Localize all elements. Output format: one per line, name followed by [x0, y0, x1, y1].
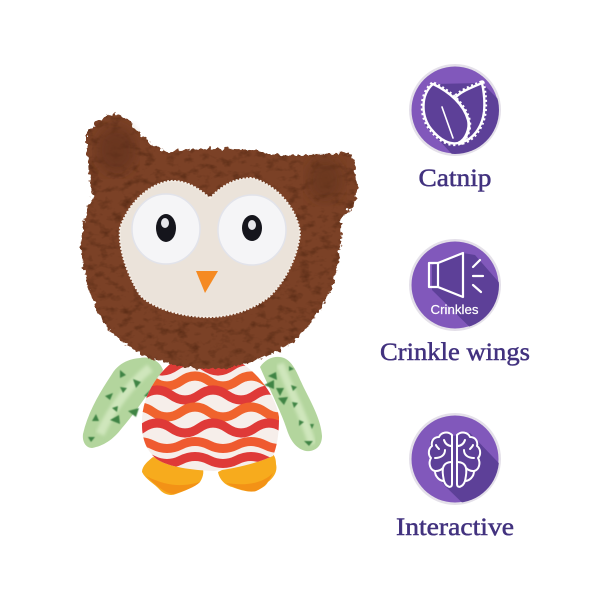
interactive shadow [430, 433, 499, 502]
catnip label: Catnip [418, 165, 492, 192]
ear shading [96, 126, 136, 174]
right foot [218, 453, 276, 492]
face patch [120, 178, 300, 317]
crinkle wings label: Crinkle wings [380, 339, 530, 366]
furry head [81, 114, 356, 368]
icon: brain [429, 433, 480, 487]
right eye [218, 195, 286, 265]
interactive label: Interactive [396, 514, 514, 541]
crinkles badge [409, 239, 501, 331]
crinkles shadow [432, 253, 499, 326]
icon: catnip leaves [424, 83, 484, 143]
left eye [132, 194, 200, 264]
striped body [142, 364, 279, 471]
catnip badge [409, 64, 501, 156]
right wing [260, 357, 322, 451]
left foot [142, 457, 203, 495]
catnip shadow [425, 83, 499, 154]
interactive badge [409, 413, 501, 505]
beak [196, 271, 218, 293]
owl plush toy [81, 114, 356, 495]
icon: speaker [429, 253, 483, 297]
crinkles caption: Crinkles [430, 302, 479, 317]
left wing [83, 358, 163, 448]
